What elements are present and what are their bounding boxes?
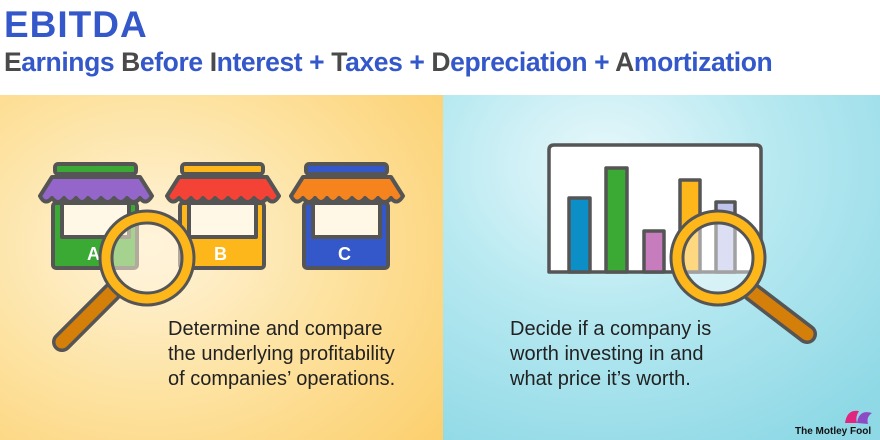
- text: right description: what price it’s worth.: [510, 368, 691, 390]
- icon: magnifier left: [62, 211, 194, 342]
- panel: left: [0, 95, 443, 440]
- text: left description: the underlying profitability: [168, 343, 395, 365]
- text: right description: [510, 318, 711, 390]
- title: EBITDA: [4, 4, 148, 45]
- chart: bar chart board: [549, 145, 761, 272]
- icon: shop A: [40, 164, 152, 268]
- logo: jester hat: [845, 411, 872, 424]
- logo: The Motley Fool: The Motley Fool: [795, 426, 871, 437]
- icon: shop A: A: [87, 244, 100, 264]
- icon: shop B: B: [214, 244, 227, 264]
- icon: shop C: [291, 164, 403, 268]
- icon: shop B: [167, 164, 279, 268]
- text: right description: Decide if a company is: [510, 318, 711, 340]
- panel: right: [443, 95, 880, 440]
- icon: shop C: C: [338, 244, 351, 264]
- text: left description: [168, 318, 395, 390]
- text: right description: worth investing in and: [510, 343, 703, 365]
- icon: magnifier right: [671, 211, 807, 334]
- subtitle: Earnings Before Interest + Taxes + Depreciation + Amortization: [4, 47, 772, 77]
- text: left description: of companies’ operations.: [168, 368, 395, 390]
- text: left description: Determine and compare: [168, 318, 383, 340]
